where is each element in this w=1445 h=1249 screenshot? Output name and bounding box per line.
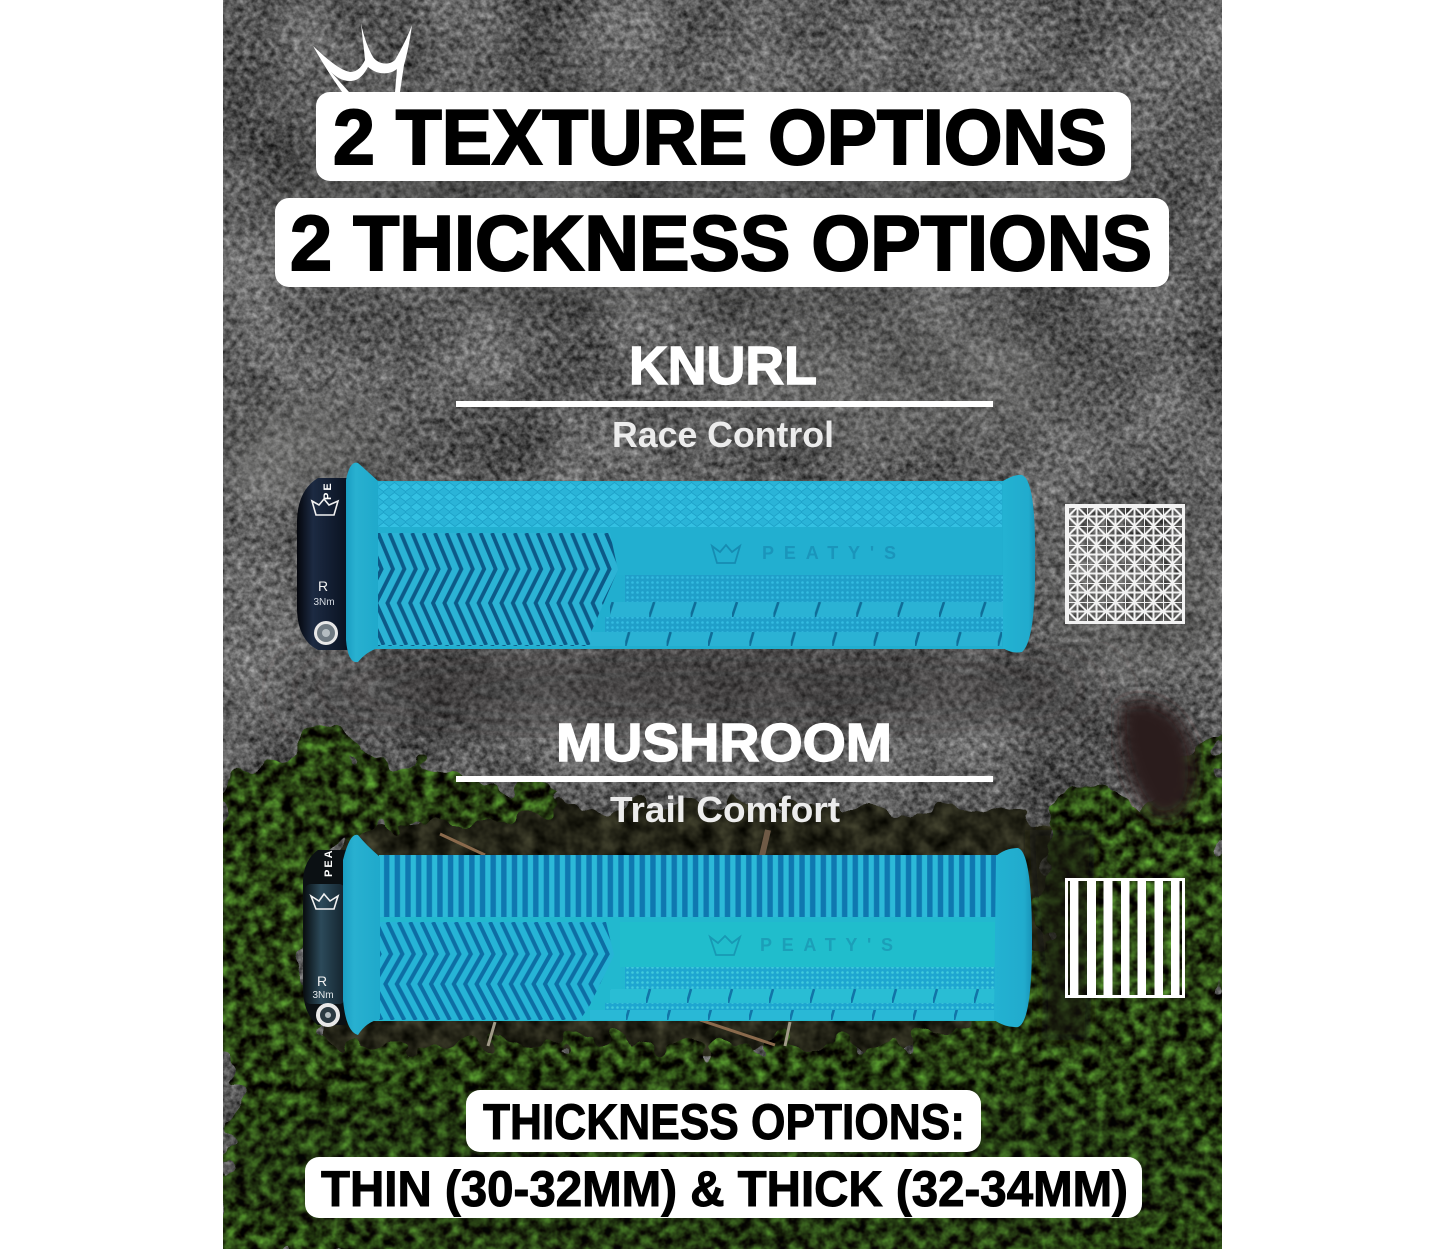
texture swatch: mushroom ribs: [1066, 878, 1184, 998]
end cap: [1003, 475, 1035, 652]
stone texture: [223, 0, 1222, 1249]
stone tonal shading: [210, 100, 1230, 730]
grip logo: PEATY'S: [760, 935, 893, 955]
heading: knurl: Race Control: [612, 414, 834, 455]
lock ring: PEA: [323, 848, 335, 877]
grip logo: PEATY'S: [762, 543, 896, 563]
tread tiles: [590, 989, 1000, 1020]
lock ring: 3Nm: [313, 597, 335, 608]
photo background: stone and moss: [200, 0, 1240, 1249]
heading: mushroom: MUSHROOM: [556, 713, 892, 773]
moss darkening at the right: [1030, 830, 1095, 1040]
chevron tread: [376, 922, 614, 1020]
heading: knurl: [456, 336, 993, 455]
knurl texture band: [378, 482, 1002, 527]
heading: mushroom: Trail Comfort: [610, 789, 840, 830]
dark earth patch top right: [1119, 700, 1196, 819]
heading: knurl: KNURL: [629, 336, 817, 396]
lock ring: R: [318, 578, 328, 594]
flange: [343, 835, 380, 1035]
lock ring: [303, 848, 346, 1027]
lock ring: R: [317, 973, 327, 989]
title pill: 2 thickness options: 2 THICKNESS OPTIONS: [290, 199, 1152, 287]
thickness pill: sizes: THIN (30-32MM) & THICK (32-34MM): [321, 1161, 1128, 1217]
flange: [346, 463, 378, 662]
twigs: [440, 830, 790, 1046]
end cap: [994, 848, 1032, 1027]
grip body: [366, 857, 1006, 1021]
dotted lower bands: [605, 967, 1000, 1010]
heading: mushroom: [456, 713, 993, 830]
plain middle band: [620, 922, 1002, 967]
plain middle band: [378, 527, 1002, 575]
mushroom grip: [303, 835, 1032, 1035]
vertical ribs: [379, 855, 1001, 917]
dark soil under lower grip: [320, 804, 1050, 1060]
title pill: 2 texture options: 2 TEXTURE OPTIONS: [333, 93, 1107, 181]
grip body: [368, 481, 1008, 649]
lock ring: [297, 478, 350, 650]
texture swatch: knurl lattice: [1066, 506, 1184, 622]
tread tiles: [590, 602, 1003, 646]
dotted lower bands: [605, 575, 1003, 632]
knurl grip: [297, 463, 1035, 662]
lock ring: 3Nm: [312, 990, 334, 1001]
lock ring: PE: [322, 481, 334, 500]
chevron tread: [378, 533, 618, 646]
crown logo: [313, 23, 412, 92]
moss: [200, 720, 1240, 1249]
thickness pill: heading: THICKNESS OPTIONS:: [483, 1094, 965, 1150]
moss darkening at the bottom: [200, 1080, 1240, 1249]
